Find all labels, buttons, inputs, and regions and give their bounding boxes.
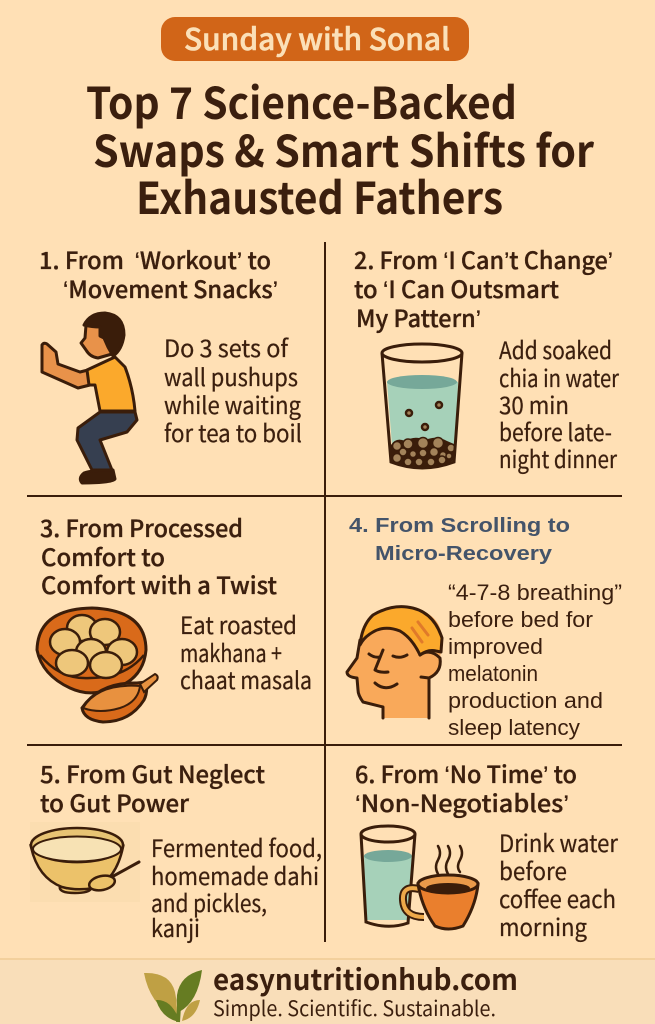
body text 6: before [499, 852, 567, 887]
body text 4 [448, 580, 622, 740]
website name: easynutritionhub.com [213, 957, 518, 999]
panel 2: outsmart my pattern [354, 241, 620, 475]
tagline: Simple. Scientific. Sustainable. [213, 993, 496, 1023]
heading 5: to Gut Power [40, 784, 189, 819]
body text 5 [151, 829, 322, 944]
body text 3: chaat masala [180, 661, 312, 696]
icon: bowl of makhana and spoon of masala [37, 608, 158, 722]
panel 6: non-negotiables [355, 755, 619, 943]
heading 4: 4. From Scrolling to [349, 514, 570, 537]
body text 6: morning [499, 908, 587, 943]
panel 5: gut power [30, 755, 322, 944]
body text 5: homemade dahi [151, 857, 319, 892]
heading 3 [40, 509, 277, 601]
heading 3: 3. From Processed [40, 509, 243, 544]
title: Top 7 Science-Backed [86, 68, 517, 132]
body text 4: before bed for [448, 607, 593, 632]
panel 1: movement snacks [39, 241, 302, 483]
heading 6: 6. From ‘No Time’ to [355, 755, 577, 790]
icon: glass of chia water [382, 344, 462, 469]
heading 6 [355, 755, 577, 819]
badge: Sunday with Sonal: Sunday with Sonal [184, 15, 450, 59]
body text 5: kanji [151, 909, 200, 944]
heading 2: My Pattern’ [356, 299, 481, 334]
title: Exhausted Fathers [136, 163, 503, 227]
body text 2: Add soaked [499, 331, 612, 366]
footer band [0, 957, 655, 1024]
heading 5 [40, 755, 265, 819]
heading 3: Comfort with a Twist [41, 566, 277, 601]
heading 4: Micro-Recovery [375, 542, 553, 565]
body text 2: night dinner [499, 440, 618, 475]
body text 4: sleep latency [448, 715, 580, 740]
panel 3: comfort with a twist [37, 509, 312, 722]
grid dividers [27, 242, 622, 942]
body text 2: chia in water [499, 359, 620, 394]
title [86, 68, 595, 227]
panel 4: micro-recovery [347, 514, 622, 740]
heading 2: 2. From ‘I Can’t Change’ [354, 241, 613, 276]
body text 4: melatonin [448, 661, 538, 686]
heading 1 [39, 241, 278, 305]
body text 1: wall pushups [164, 358, 298, 393]
body text 6: coffee each [499, 880, 616, 915]
icon: leaf logo [144, 970, 202, 1022]
body text 6: Drink water [499, 824, 619, 859]
body text 3: Eat roasted [180, 606, 297, 641]
body text 1: for tea to boil [164, 414, 302, 449]
body text 6 [499, 824, 619, 943]
icon: calm face with eyes closed [347, 607, 442, 718]
body text 2: before late- [499, 413, 612, 448]
body text 3 [180, 606, 312, 696]
heading 3: Comfort to [41, 538, 165, 573]
icon: bowl of dahi with spoon [30, 822, 140, 902]
body text 1: Do 3 sets of [164, 329, 289, 364]
body text 4: production and [448, 688, 603, 713]
body text 3: makhana + [180, 634, 282, 669]
body text 4: improved [448, 634, 543, 659]
icon: squatting man [42, 313, 137, 483]
body text 5: and pickles, [151, 884, 267, 919]
heading 2: to ‘I Can Outsmart [354, 270, 559, 305]
icon: glass of water and coffee cup [361, 826, 478, 929]
body text 2 [499, 331, 620, 475]
body text 2: 30 min [499, 386, 569, 421]
heading 1: 1. From ‘Workout’ to [39, 241, 271, 276]
heading 4 [349, 514, 570, 565]
heading 1: ‘Movement Snacks’ [63, 270, 278, 305]
heading 2 [354, 241, 613, 334]
body text 1: while waiting [164, 386, 301, 421]
body text 1 [164, 329, 302, 449]
heading 5: 5. From Gut Neglect [40, 755, 265, 790]
body text 4: “4-7-8 breathing” [448, 580, 622, 605]
body text 5: Fermented food, [151, 829, 322, 864]
heading 6: ‘Non-Negotiables ’ [355, 784, 569, 819]
title: Swaps & Smart Shifts for [93, 116, 595, 180]
